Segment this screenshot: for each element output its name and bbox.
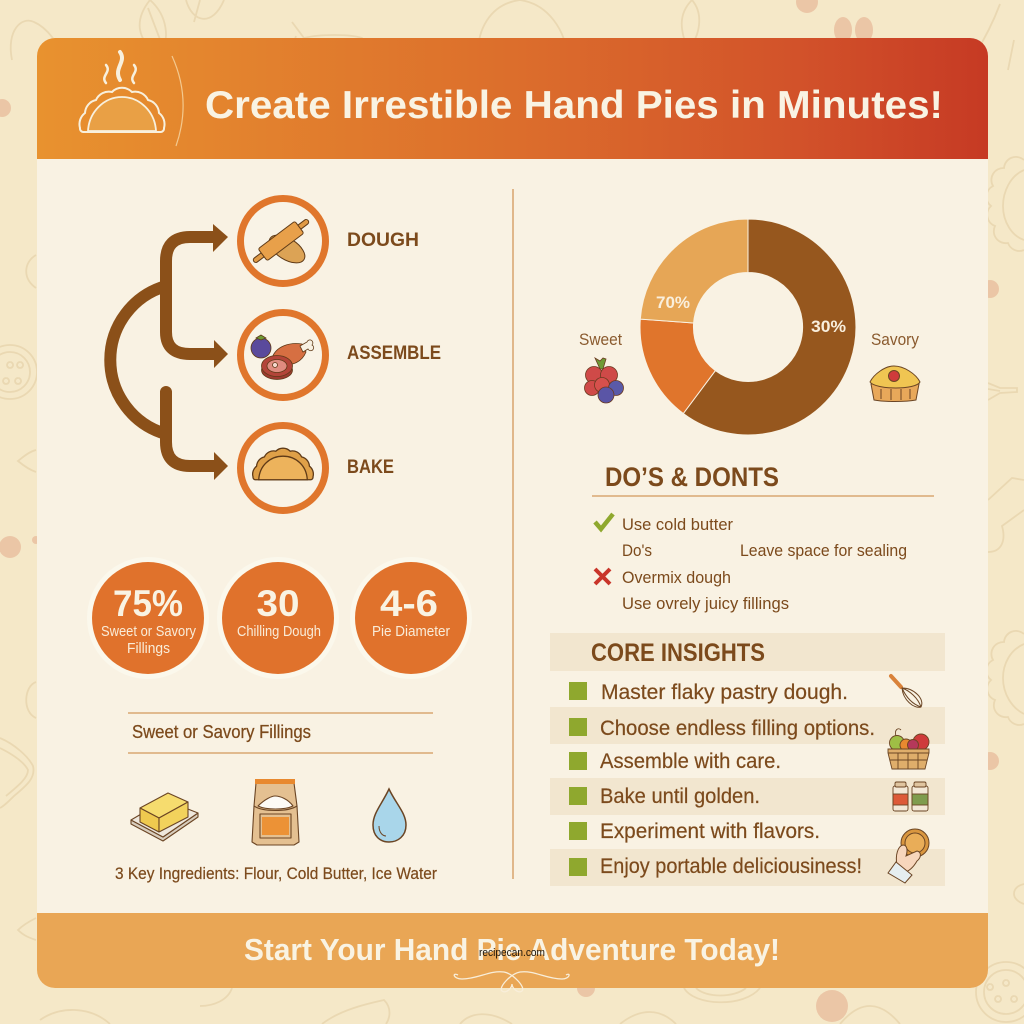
insights text: Enjoy portable deliciousiness! [600,855,862,878]
icon: butter [131,793,198,841]
icon: water drop [373,789,406,842]
footer banner [37,913,988,992]
value 30%: 30% [811,317,846,336]
flourish [454,972,569,992]
stat: 30 chilling dough [217,557,339,679]
icon: flour bag [252,779,299,845]
list text: Overmix dough [622,568,731,587]
label: savory: Savory [871,330,919,349]
list text: Leave space for sealing [740,541,907,560]
insights text: Experiment with flavors. [600,820,820,843]
step: assemble [240,312,441,398]
label: ASSEMBLE [347,343,441,364]
stat: 75% fillings [87,557,209,679]
heading: DO’S & DONTS [605,462,779,492]
label: sweet: Sweet [579,330,622,349]
icon: cross [595,569,610,584]
value 70%: 70% [656,293,690,312]
stat circles [87,557,472,679]
insights text: Bake until golden. [600,785,760,808]
segment: light sweet [640,219,748,323]
segment: savory dark [683,219,856,435]
core insights panel [550,633,945,886]
stat: 30 chilling dough: 30 [256,583,300,624]
icon: berry and meats [251,335,314,380]
label: BAKE [347,457,394,478]
heading: CORE INSIGHTS [591,639,765,667]
insights text [600,681,875,878]
fillings caption with rules: Sweet or Savory Fillings [132,722,311,742]
stat: 75% fillings: 75% [113,583,183,624]
list text: Do's [622,541,652,560]
icon: fruit basket [888,729,929,769]
insights text: Assemble with care. [600,750,781,773]
insights text: Choose endless filling options. [600,717,875,740]
label: DOUGH [347,230,419,251]
stat: 4-6 pie diameter: 4-6 [380,583,438,624]
watermark: recipecan.com [479,947,545,959]
flow diagram: dough, assemble, bake [110,198,441,510]
icon: savory tart [870,366,920,402]
branching arrows [110,224,228,480]
do's and don'ts [592,462,934,613]
step: bake [240,426,394,510]
stat: 4-6 pie diameter [350,557,472,679]
list text: Use cold butter [622,515,733,534]
segment: orange [640,319,715,414]
header banner [37,38,988,159]
call to action: Start Your Hand Pie Adventure Today! [244,932,780,967]
insights text: Master flaky pastry dough. [601,681,848,704]
icon: steaming hand pie [79,52,165,132]
stat: 75% fillings: Fillings [127,641,170,657]
icon: baked hand pie [253,448,313,480]
icon: hand holding pie [888,829,929,883]
step: dough [240,198,419,284]
icon: spice jars [893,782,928,811]
title: Create Irrestible Hand Pies in Minutes! [205,84,943,127]
stat: 30 chilling dough: Chilling Dough [237,624,321,640]
icon: rolling pin and dough [249,215,313,269]
stat: 4-6 pie diameter: Pie Diameter [372,624,450,640]
ingredients [115,779,437,883]
stat: 75% fillings: Sweet or Savory [101,624,197,640]
icon: berries [584,358,624,403]
caption: 3 Key Ingredients: Flour, Cold Butter, Ice Water [115,865,437,883]
bullets [569,682,587,876]
icon: whisk [891,676,922,707]
icon: check [595,514,613,529]
list text: Use ovrely juicy fillings [622,594,789,613]
list text [622,515,907,613]
column divider [512,189,514,879]
donut chart: sweet vs savory [579,219,920,435]
decorative arc divider [172,56,183,146]
